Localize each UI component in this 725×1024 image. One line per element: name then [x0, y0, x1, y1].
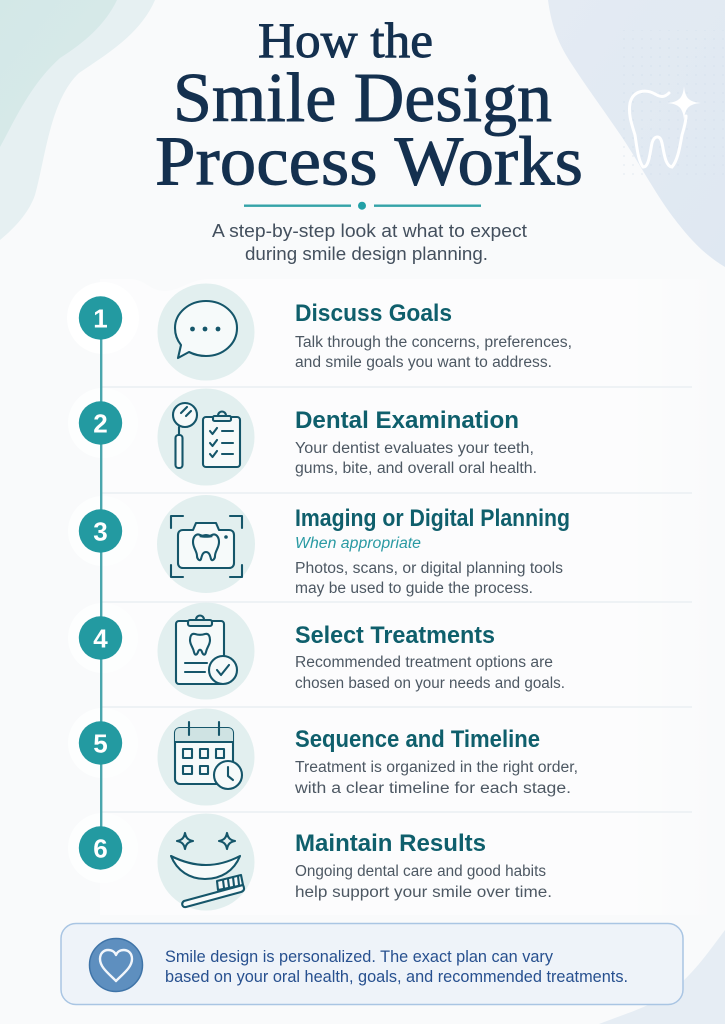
callout text [165, 948, 628, 986]
icon: calendar with clock [158, 708, 254, 806]
text: Sequence and Timeline: with a clear timeline for each stage. [294, 780, 571, 797]
text: Sequence and Timeline: Sequence and Timeline [295, 726, 540, 753]
text: Imaging or Digital Planning: Photos, scans, or digital planning tools [295, 560, 563, 577]
title [155, 12, 583, 200]
text: Imaging or Digital Planning [295, 505, 570, 597]
step 2 [79, 388, 537, 486]
number badge 4 [79, 616, 122, 660]
step 1 [79, 284, 572, 380]
icon: speech bubble [158, 284, 254, 380]
callout text: Smile design is personalized. The exact plan can vary [165, 948, 554, 966]
text: Select Treatments: Select Treatments [295, 622, 495, 649]
text: Discuss Goals: and smile goals you want to address. [295, 354, 552, 371]
text: Select Treatments: Recommended treatment options are [295, 654, 553, 671]
text: Dental Examination [295, 407, 537, 477]
text: Maintain Results [295, 830, 552, 901]
text: Select Treatments [295, 622, 565, 692]
number badge 5: 5 [93, 728, 108, 758]
step 5 [79, 708, 578, 806]
callout [61, 924, 683, 1004]
text: Maintain Results: Ongoing dental care and good habits [295, 863, 546, 880]
icon: smile, sparkles and toothbrush [158, 814, 254, 910]
number badge 3: 3 [93, 516, 108, 546]
text: Select Treatments: chosen based on your needs and goals. [295, 675, 565, 692]
step 3 [79, 495, 570, 597]
text: Dental Examination: Your dentist evaluates your teeth, [295, 440, 534, 457]
icon: clipboard with tooth and check [158, 602, 254, 700]
icon: heart [90, 938, 142, 992]
number badge 1: 1 [93, 304, 108, 334]
text: Imaging or Digital Planning: may be used to guide the process. [295, 580, 533, 597]
number badge 6 [79, 826, 122, 870]
text: Dental Examination: Dental Examination [295, 407, 519, 434]
steps panel background [67, 279, 725, 915]
icon: dental mirror and checklist [158, 388, 254, 486]
title: Smile Design [173, 60, 552, 137]
step 4 [79, 602, 565, 700]
qualifier: When appropriate [295, 535, 421, 552]
number badge 6: 6 [93, 834, 108, 864]
text: Discuss Goals: Discuss Goals [295, 300, 452, 327]
number badge 2 [79, 401, 122, 445]
subtitle: during smile design planning. [245, 243, 488, 264]
text: Sequence and Timeline [294, 726, 578, 797]
title: Process Works [155, 124, 583, 200]
number badge 2: 2 [93, 408, 108, 438]
callout text: based on your oral health, goals, and recommended treatments. [165, 968, 628, 986]
number badge 5 [79, 721, 122, 765]
number badge 1 [79, 296, 122, 340]
text: Maintain Results: Maintain Results [295, 830, 486, 857]
number badge 3 [79, 509, 122, 553]
subtitle: A step-by-step look at what to expect [212, 220, 527, 241]
text: Discuss Goals: Talk through the concerns, preferences, [295, 334, 572, 351]
text: Maintain Results: help support your smile over time. [295, 884, 552, 901]
step 6 [79, 814, 552, 910]
text: Imaging or Digital Planning: Imaging or Digital Planning [295, 505, 570, 532]
timeline line [100, 320, 102, 850]
text: Dental Examination: gums, bite, and overall oral health. [295, 460, 537, 477]
text: Sequence and Timeline: Treatment is organized in the right order, [295, 759, 578, 776]
icon: tooth with sparkle [629, 86, 701, 167]
title divider [244, 202, 481, 210]
subtitle [212, 220, 527, 264]
text: Discuss Goals [295, 300, 572, 371]
icon: camera with tooth [157, 495, 255, 593]
title: How the [258, 12, 433, 68]
number badge 4: 4 [93, 624, 108, 654]
